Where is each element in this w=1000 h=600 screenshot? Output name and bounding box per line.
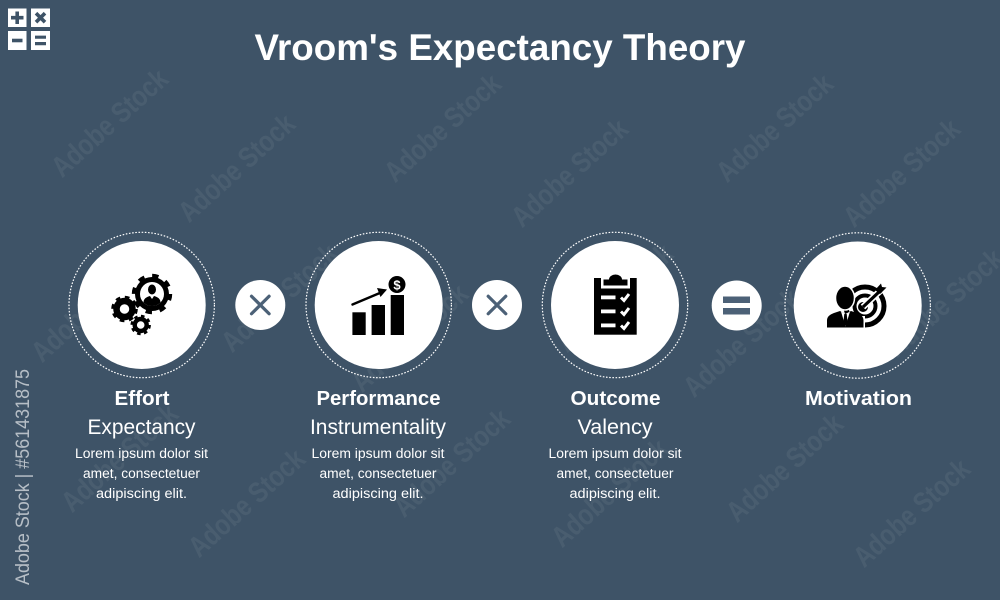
watermark pattern: Adobe Stock	[550, 237, 680, 359]
performance subheading: Instrumentality	[310, 416, 446, 439]
watermark pattern: Adobe Stock	[345, 277, 475, 399]
effort subheading: Expectancy	[88, 416, 196, 439]
watermark pattern: Adobe Stock	[378, 67, 508, 189]
panel: motivation	[785, 233, 930, 410]
watermark pattern: Adobe Stock	[25, 247, 155, 369]
watermark pattern: Adobe Stock	[720, 407, 850, 529]
outcome description	[548, 446, 682, 501]
effort circle	[69, 232, 214, 378]
watermark pattern: Adobe Stock	[545, 432, 675, 554]
panel: performance	[306, 232, 451, 501]
watermark pattern: Adobe Stock	[45, 62, 175, 184]
watermark pattern: Adobe Stock	[172, 107, 302, 229]
stock credit: Adobe Stock | #561431875	[13, 369, 34, 585]
watermark pattern: Adobe Stock	[387, 402, 517, 524]
icon: gears with person	[113, 276, 170, 334]
watermark pattern: Adobe Stock	[677, 282, 807, 404]
watermark pattern: Adobe Stock	[182, 442, 312, 564]
motivation heading: Motivation	[805, 388, 912, 410]
motivation circle	[785, 233, 930, 378]
outcome heading: Outcome	[570, 388, 660, 410]
operator: multiply	[235, 280, 285, 330]
icon: clipboard checklist	[594, 274, 637, 335]
performance description: amet, consectetuer	[320, 466, 437, 481]
panel: effort	[69, 232, 214, 501]
effort description: adipiscing elit.	[96, 486, 187, 501]
performance description	[312, 446, 445, 501]
effort description: amet, consectetuer	[83, 466, 201, 481]
outcome circle	[542, 232, 688, 378]
performance circle	[306, 232, 451, 378]
outcome subheading: Valency	[578, 416, 653, 439]
icon: rising bar chart with coin: $	[393, 278, 401, 292]
performance description: Lorem ipsum dolor sit	[312, 446, 445, 461]
watermark pattern: Adobe Stock	[505, 112, 635, 234]
title: Vroom's Expectancy Theory	[254, 27, 746, 68]
operator: equals	[712, 280, 762, 330]
performance description: adipiscing elit.	[332, 486, 424, 501]
icon: businessman with target	[827, 284, 886, 329]
icon: math operators	[8, 8, 50, 50]
operator: multiply	[472, 280, 522, 330]
outcome description: Lorem ipsum dolor sit	[548, 446, 682, 461]
outcome description: amet, consectetuer	[556, 466, 674, 481]
watermark pattern: Adobe Stock	[847, 452, 977, 574]
watermark pattern: Adobe Stock	[215, 237, 345, 359]
panel: outcome	[542, 232, 688, 501]
icon: rising bar chart with coin	[352, 276, 406, 335]
effort heading: Effort	[114, 388, 170, 410]
effort description	[75, 446, 208, 501]
effort description: Lorem ipsum dolor sit	[75, 446, 208, 461]
watermark pattern: Adobe Stock	[710, 67, 840, 189]
watermark pattern: Adobe Stock	[55, 397, 185, 519]
outcome description: adipiscing elit.	[570, 486, 660, 501]
performance heading: Performance	[316, 388, 440, 410]
watermark pattern: Adobe Stock	[837, 112, 967, 234]
